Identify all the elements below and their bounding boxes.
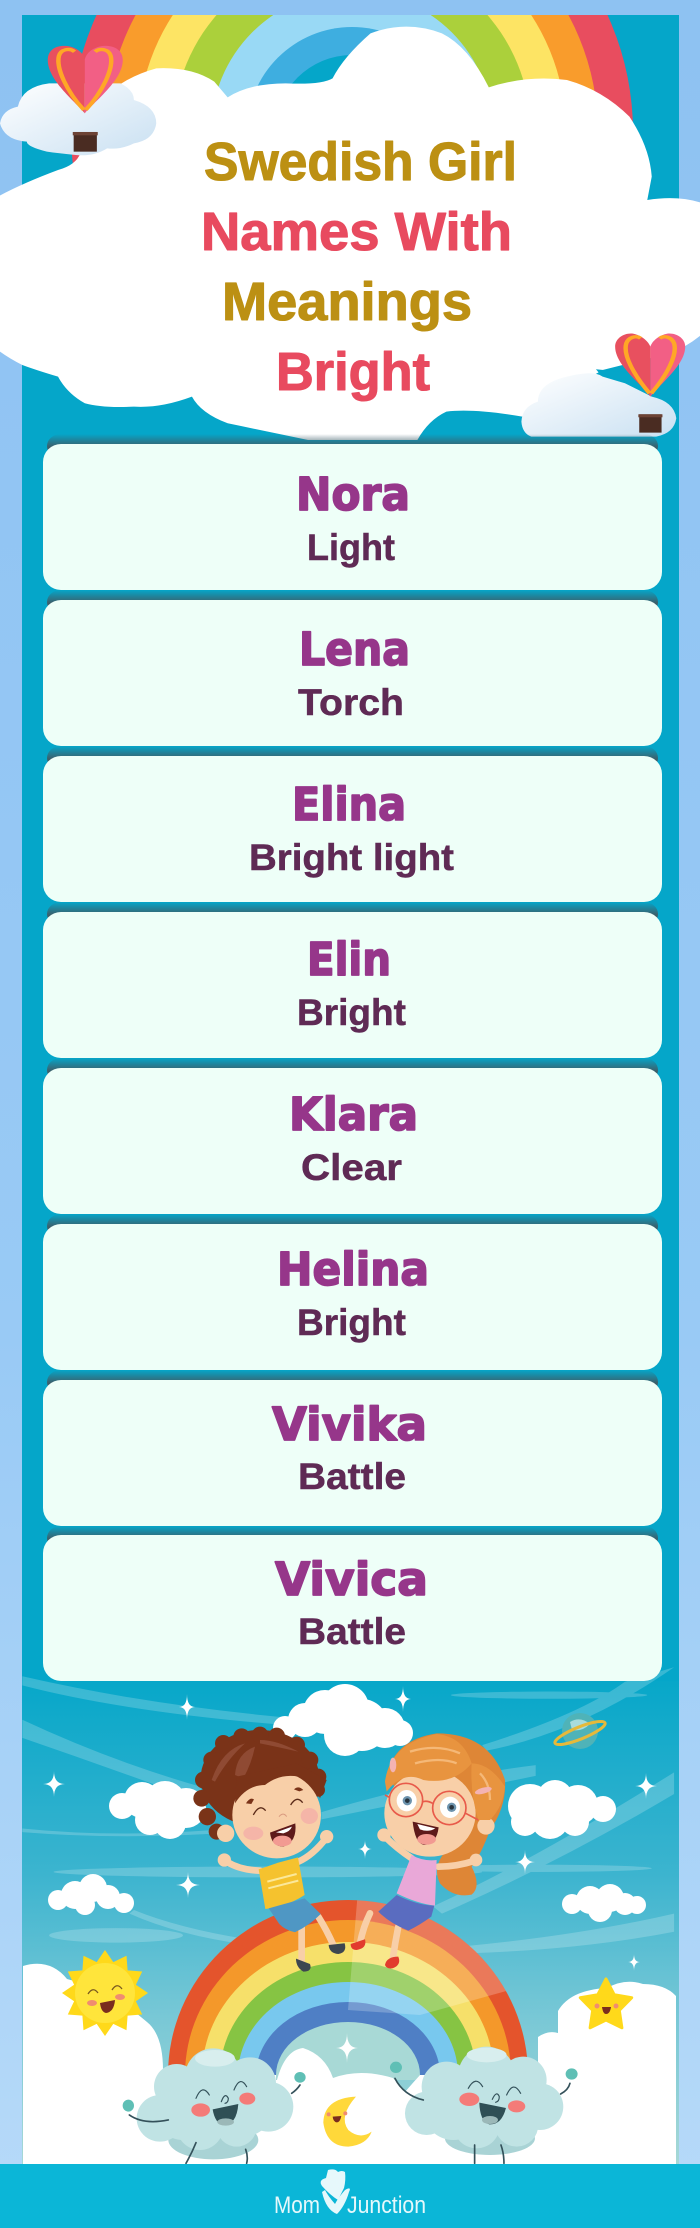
name: Vivica: Vivica — [275, 1553, 428, 1606]
right cloud character — [390, 2047, 578, 2163]
smiling star — [580, 1979, 632, 2028]
sparkles — [43, 1686, 657, 2063]
boy and girl on rainbow — [193, 1727, 505, 1972]
hair — [193, 1727, 326, 1840]
crescent moon — [323, 2097, 372, 2147]
white clouds — [48, 1684, 646, 1922]
name: Elina: Elina — [292, 778, 406, 831]
card: Lena — [43, 590, 662, 746]
meaning: Light: Light — [307, 527, 395, 568]
header cloud — [0, 27, 700, 440]
small cloud — [596, 369, 629, 382]
name: Lena: Lena — [299, 623, 410, 676]
card: Vivica — [43, 1526, 662, 1681]
cloud characters and moon — [123, 2047, 578, 2163]
balloon with cloud: top left — [0, 46, 156, 155]
title: Names With — [201, 202, 512, 262]
meaning: Bright light: Bright light — [249, 837, 454, 878]
card: Klara — [43, 1058, 662, 1214]
meaning: Bright: Bright — [297, 1302, 406, 1343]
name: Helina: Helina — [277, 1243, 429, 1296]
meaning: Battle: Battle — [298, 1611, 406, 1652]
title: Bright — [276, 342, 430, 402]
planet — [553, 1713, 607, 1749]
meaning: Bright: Bright — [297, 992, 406, 1033]
smiling sun — [62, 1950, 148, 2036]
name: Klara: Klara — [289, 1088, 418, 1141]
name cards — [43, 434, 662, 1681]
illustration panel — [22, 1667, 679, 2164]
logo icon — [321, 2169, 350, 2214]
logo: MomJunction: Mom — [274, 2192, 320, 2219]
card: Vivika — [43, 1370, 662, 1526]
logo: MomJunction: Junction — [347, 2192, 426, 2219]
boy — [193, 1727, 345, 1972]
title: Meanings — [222, 272, 472, 332]
inner teal panel — [22, 15, 679, 1715]
name: Nora: Nora — [296, 468, 410, 521]
large rainbow — [168, 1890, 528, 2095]
logo: MomJunction — [274, 2169, 426, 2219]
name: Elin: Elin — [307, 933, 391, 986]
girl — [351, 1733, 505, 1968]
card: Elina — [43, 746, 662, 902]
title: Swedish Girl — [204, 132, 517, 192]
card: Elin — [43, 902, 662, 1058]
small cloud — [0, 83, 156, 155]
balloon with cloud: right — [521, 334, 685, 437]
sky — [22, 1681, 679, 2164]
meaning: Torch: Torch — [298, 682, 404, 723]
header rainbow — [72, 15, 633, 164]
card: Nora — [43, 434, 662, 590]
name: Vivika: Vivika — [272, 1398, 427, 1451]
sky wisps — [22, 1667, 674, 1953]
balloon — [615, 334, 685, 433]
card: Helina — [43, 1214, 662, 1370]
meaning: Clear: Clear — [301, 1147, 402, 1188]
footer bar — [0, 2164, 700, 2228]
balloon — [48, 46, 123, 152]
white ground clouds — [23, 1964, 676, 2164]
title — [201, 132, 517, 402]
left cloud character — [123, 2048, 306, 2163]
meaning: Battle: Battle — [298, 1456, 406, 1497]
